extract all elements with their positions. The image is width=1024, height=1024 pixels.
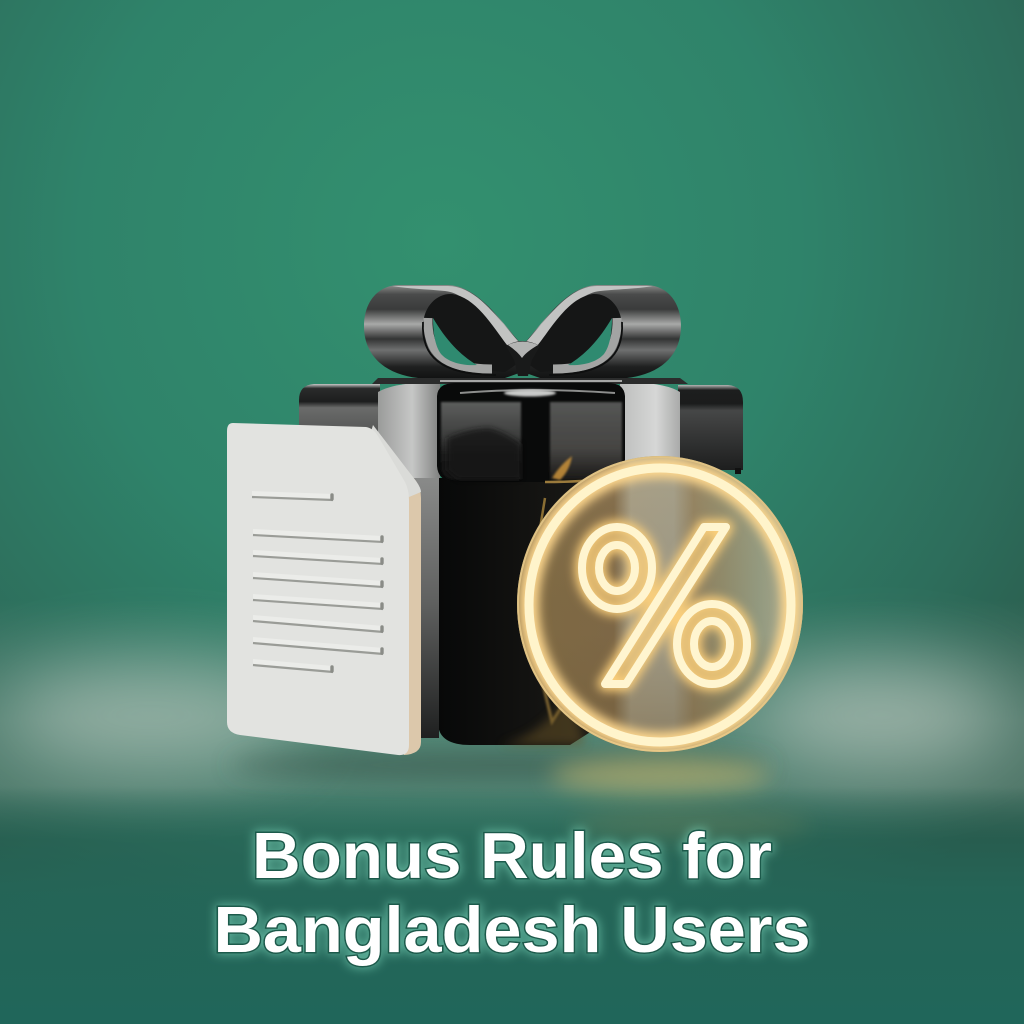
icon: glowing percent coin — [517, 456, 803, 752]
title: Bangladesh Users — [214, 893, 810, 966]
left bow loop — [364, 285, 522, 378]
percent sign neon outline — [582, 527, 747, 684]
title: Bonus Rules for — [252, 819, 772, 892]
bow knot — [506, 341, 540, 376]
lid top highlight — [460, 390, 615, 393]
lid top sliver — [372, 378, 688, 384]
document edge thickness — [373, 427, 421, 755]
gold edge reflection — [545, 478, 610, 482]
document face — [227, 423, 409, 755]
document raised text lines — [252, 491, 383, 672]
right bow loop — [523, 285, 681, 378]
box body — [438, 478, 735, 745]
lid left side — [299, 384, 380, 472]
centre lid block — [437, 383, 625, 482]
bow — [364, 285, 681, 378]
icon: black gift box with silver ribbon — [299, 285, 743, 745]
icon: white document with text lines — [227, 423, 421, 755]
title — [214, 819, 810, 966]
ribbon band left — [378, 382, 440, 478]
coin neon ring — [529, 468, 791, 742]
lid right side — [678, 385, 743, 470]
ribbon band right — [620, 382, 680, 480]
